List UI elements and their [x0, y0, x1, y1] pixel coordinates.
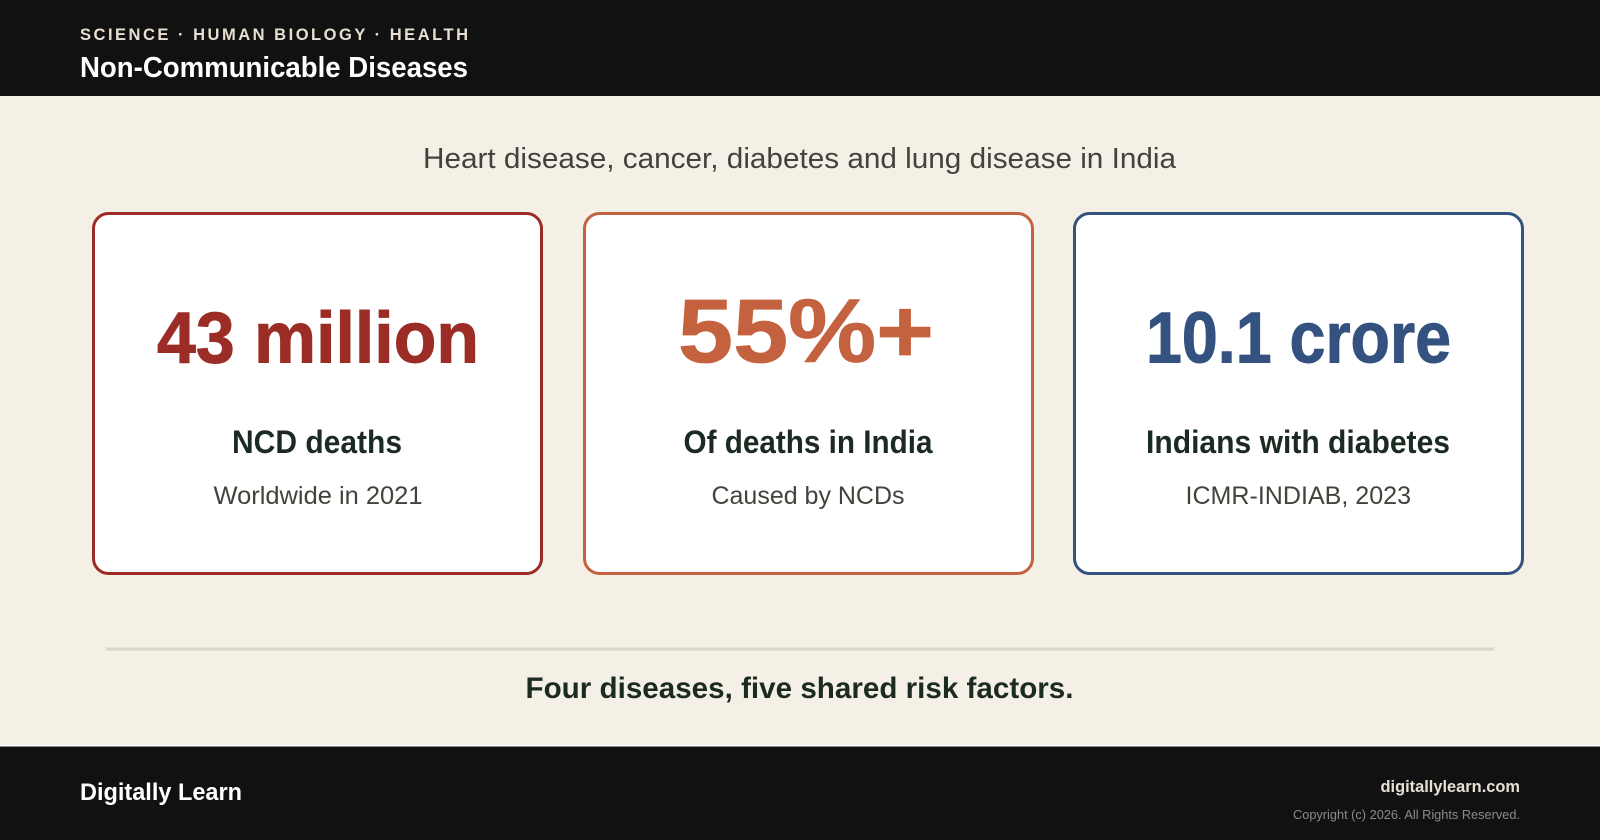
header bar	[0, 0, 1600, 96]
closing statement: Four diseases, five shared risk factors.	[526, 672, 1074, 705]
label: NCD deaths: NCD deaths	[232, 424, 402, 460]
label: Indians with diabetes: Indians with diabetes	[1146, 424, 1450, 460]
stat: 55%+: 55%+	[678, 282, 934, 382]
title: Non-Communicable Diseases	[80, 52, 468, 84]
stat: 10.1 crore: 10.1 crore	[1146, 298, 1451, 378]
panel: Indians with diabetes	[1074, 214, 1522, 574]
label: Of deaths in India: Of deaths in India	[684, 424, 933, 460]
subtitle: Heart disease, cancer, diabetes and lung disease in India	[423, 143, 1177, 175]
footer bar	[0, 745, 1600, 840]
panel: NCD deaths	[94, 214, 542, 574]
eyebrow text: SCIENCE · HUMAN BIOLOGY · HEALTH	[80, 26, 468, 44]
detail: Caused by NCDs: Caused by NCDs	[712, 482, 904, 510]
detail: ICMR-INDIAB, 2023: ICMR-INDIAB, 2023	[1186, 482, 1411, 510]
stat: 43 million: 43 million	[157, 298, 479, 378]
panel: deaths in India	[584, 214, 1032, 574]
footer brand: Digitally Learn	[80, 779, 242, 806]
footer copyright: Copyright (c) 2026. All Rights Reserved.	[1293, 807, 1520, 822]
detail: Worldwide in 2021: Worldwide in 2021	[214, 482, 422, 510]
footer site: digitallylearn.com	[1380, 777, 1520, 796]
